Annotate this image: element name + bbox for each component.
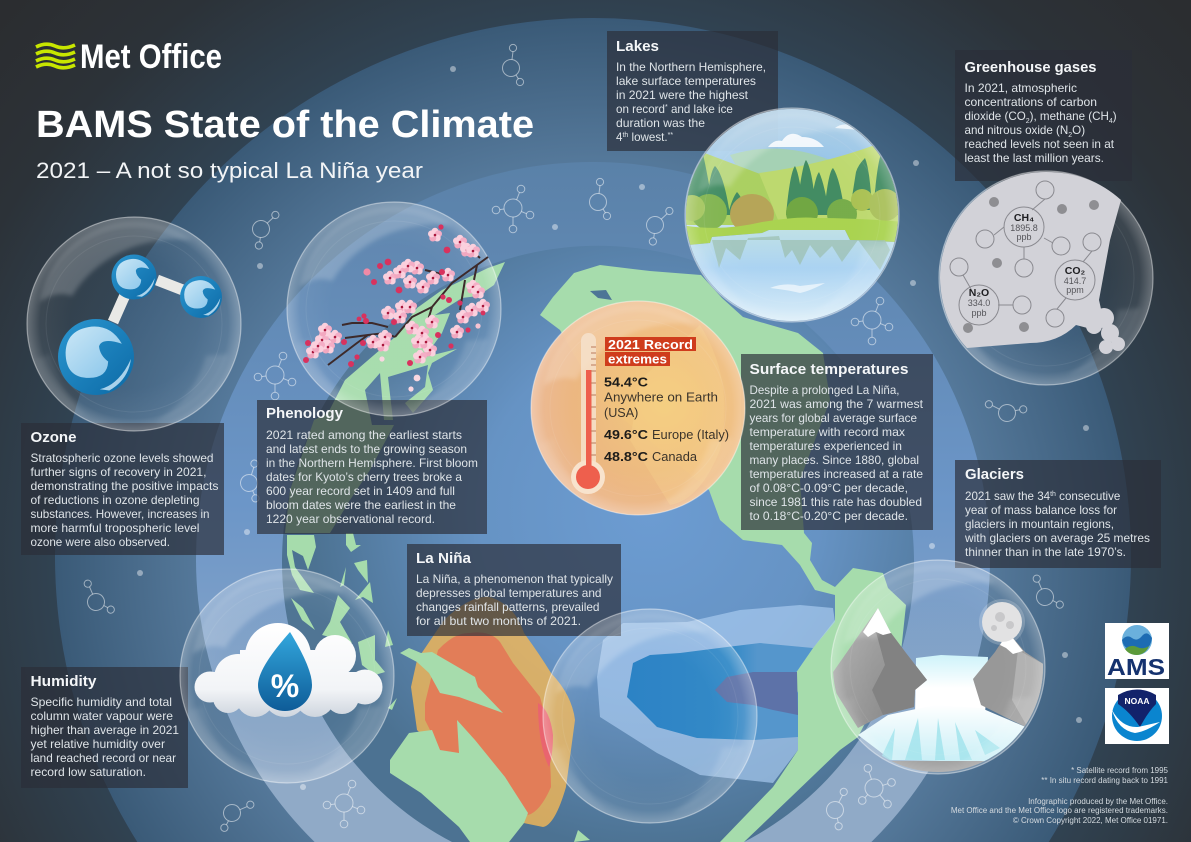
CH4 value: 1895.8 [1010, 223, 1038, 233]
icon: thermometer [571, 333, 605, 494]
bubble: phenology cherry blossom [287, 202, 501, 416]
bubble: glacier scene [831, 560, 1045, 774]
panel: greenhouse gases text: 4 [1109, 118, 1113, 125]
panel: phenology text: Phenology [266, 405, 344, 422]
CH4 value: ppb [1016, 232, 1032, 242]
logo: Met Office [36, 38, 222, 76]
credits [951, 797, 1168, 825]
panel: lakes text [607, 31, 778, 151]
icon: branch [328, 243, 488, 365]
record values: Anywhere on Earth [604, 390, 718, 404]
cold: outer anomaly [597, 605, 835, 783]
bubble: 2021 record extremes thermometer [531, 301, 745, 515]
panel: humidity text: Humidity [30, 673, 97, 690]
panel: glaciers text: th [1050, 491, 1056, 498]
dark dots [963, 197, 1099, 333]
land: Asia [285, 262, 505, 533]
panel: La Niña text: depresses global temperatures and [416, 587, 602, 600]
icon: wave logo [36, 44, 75, 68]
label: record extremes highlight: 2021 Record [608, 338, 693, 352]
panel: glaciers text: 2021 saw the 34 [965, 490, 1050, 503]
CO2 value [1055, 260, 1095, 300]
bubble: humidity cloud [180, 569, 394, 783]
small circles [950, 181, 1101, 327]
panel: greenhouse gases text: 2 [1026, 118, 1030, 125]
subtitle: 2021 – A not so typical La Niña year [36, 158, 424, 183]
record values: 49.6°C [604, 428, 648, 442]
logo: NOAA: NOAA [1124, 696, 1150, 706]
panel: lakes text: and lake ice [668, 103, 733, 116]
panel: lakes text: in 2021 were the highest [616, 89, 749, 102]
icon: glacier [915, 655, 988, 715]
panel: greenhouse gases text: and nitrous oxide (N [964, 124, 1068, 137]
logo: NOAA [1105, 688, 1169, 744]
N2O value: N₂O [969, 287, 989, 299]
record values: 54.4°C [604, 376, 648, 390]
footnotes: * Satellite record from 1995 [1071, 766, 1169, 775]
icon: left mountain [831, 608, 927, 728]
panel: greenhouse gases text: In 2021, atmospheric [964, 82, 1077, 95]
panel: greenhouse gases text: reached levels not seen in at [964, 138, 1115, 151]
panel: ozone text: further signs of recovery in 2021, [30, 466, 207, 479]
N2O value: ppb [971, 308, 987, 318]
icon: snow caps [863, 608, 1023, 654]
heat: core [538, 703, 553, 767]
panel: lakes text: lowest. [628, 131, 668, 144]
CO2 value: ppm [1066, 285, 1084, 295]
label: record extremes highlight [605, 337, 696, 366]
footnotes: ** In situ record dating back to 1991 [1041, 776, 1169, 785]
N2O value [959, 285, 999, 325]
panel: humidity text: land reached record or near [30, 752, 176, 765]
panel: humidity text [21, 667, 188, 788]
land: New Guinea [400, 648, 503, 713]
panel: ozone text [21, 423, 224, 555]
land: Southeast Asia islands [287, 533, 397, 710]
panel: surface temperatures text: 2021 was among the 7 warmest [750, 398, 924, 411]
panel: greenhouse gases text: Greenhouse gases [964, 59, 1096, 76]
logo: AMS [1105, 623, 1169, 680]
icon: bonds [113, 280, 188, 322]
panel: greenhouse gases text: concentrations of carbon [964, 96, 1097, 109]
panel: lakes text: th [622, 132, 628, 139]
bubble: lake landscape [679, 105, 905, 325]
record values: Europe (Italy) [652, 428, 729, 442]
panel: lakes text: on record [616, 103, 665, 116]
atmosphere inner ring [196, 162, 990, 842]
panel: greenhouse gases text: dioxide (CO [964, 110, 1026, 123]
CH4 value [1004, 207, 1044, 247]
panel: phenology text [257, 400, 487, 534]
panel: glaciers text: with glaciers on average 25 metres [964, 532, 1150, 545]
footnotes [1041, 766, 1169, 785]
cold: inner anomaly [627, 643, 813, 740]
CO2 value: 414.7 [1064, 276, 1086, 286]
record values: Canada [652, 450, 697, 464]
land: Hudson Bay sliver [590, 290, 612, 300]
panel: phenology text: 1220 year observational record. [266, 513, 435, 526]
panel: lakes text: 4 [616, 131, 622, 144]
panel: glaciers text: year of mass balance loss for [965, 504, 1117, 517]
panel: ozone text: more harmful tropospheric level [30, 522, 200, 535]
panel: greenhouse gases text: ), methane (CH [1030, 110, 1109, 123]
panel: lakes text: ** [668, 132, 673, 139]
record values [604, 376, 729, 464]
panel: surface temperatures text [741, 354, 933, 530]
panel: glaciers text [955, 460, 1161, 568]
land: Australia [390, 720, 528, 842]
title: BAMS State of the Climate [36, 104, 534, 146]
panel: surface temperatures text: of 0.08°C-0.09°C per decade, [750, 482, 908, 495]
record values: (USA) [604, 406, 638, 420]
N2O value: 334.0 [968, 298, 990, 308]
CO2 value: CO₂ [1065, 265, 1086, 277]
land: Americas [540, 265, 906, 842]
panel: ozone text: Ozone [30, 429, 76, 446]
icon: large oxygen atom [58, 319, 134, 395]
bubble: La Niña [543, 609, 757, 823]
panel: ozone text: of reductions in ozone depleting [30, 494, 200, 507]
panel: La Niña text: La Niña, a phenomenon that typically [416, 573, 613, 586]
panel: surface temperatures text: Surface temperatures [750, 361, 908, 378]
earth disc [282, 246, 914, 842]
panel: La Niña text [407, 544, 621, 636]
panel: phenology text: 600 year record set in 1409 and full [266, 485, 455, 498]
panel: lakes text: lake surface temperatures [616, 75, 756, 88]
icon: gas cloud [940, 172, 1125, 354]
panel: greenhouse gases text: ) [1113, 110, 1117, 123]
panel: La Niña text: changes rainfall patterns, prevailed [416, 601, 600, 614]
panel: ozone text: Stratospheric ozone levels showed [30, 452, 214, 465]
panel: ozone text: ozone were also observed. [30, 536, 170, 549]
panel: humidity text: Specific humidity and total [30, 696, 172, 709]
record values: 48.8°C [604, 450, 648, 464]
land: New Zealand [574, 830, 590, 842]
CH4 value: CH₄ [1014, 212, 1034, 224]
icon: top oxygen atom [112, 254, 156, 300]
panel: glaciers text: Glaciers [965, 466, 1024, 483]
panel: greenhouse gases text [955, 50, 1132, 181]
logo: AMS: AMS [1107, 654, 1165, 680]
logo: Met Office: Met Office [80, 38, 222, 76]
panel: greenhouse gases text: 2 [1068, 132, 1072, 139]
panel: phenology text: in the Northern Hemisphere. First bloom [266, 457, 478, 470]
molecule decorations [77, 44, 1089, 833]
panel: humidity text: column water vapour were [30, 710, 173, 723]
panel: glaciers text: thinner than in the late 1970’s. [965, 546, 1126, 559]
molecule links [963, 199, 1092, 309]
credits: Met Office and the Met Office logo are registered trademarks. [951, 806, 1168, 815]
panel: lakes text: * [665, 104, 668, 111]
bubble: ozone molecule [27, 217, 241, 431]
panel: phenology text: and latest ends to the growing season [266, 443, 467, 456]
panel: humidity text: higher than average in 2021 [30, 724, 179, 737]
icon: cloud [194, 623, 382, 717]
panel: phenology text: bloom dates were the earliest in the [266, 499, 456, 512]
icon: buds [303, 224, 485, 392]
panel: greenhouse gases text: least the last million years. [964, 152, 1104, 165]
panel: surface temperatures text: to 0.18°C-0.20°C per decade. [750, 510, 908, 523]
map: continents and ENSO anomalies [285, 262, 906, 842]
panel: phenology text: dates for Kyoto’s cherry trees broke a [266, 471, 463, 484]
panel: humidity text: yet relative humidity over [30, 738, 165, 751]
credits: © Crown Copyright 2022, Met Office 01971. [1013, 816, 1168, 825]
panel: lakes text: In the Northern Hemisphere, [616, 61, 766, 74]
panel: glaciers text: glaciers in mountain regions, [965, 518, 1114, 531]
icon: water drop [258, 632, 312, 711]
credits: Infographic produced by the Met Office. [1028, 797, 1168, 806]
panel: greenhouse gases text: O) [1072, 124, 1085, 137]
panel: surface temperatures text: temperatures increased at a rate [750, 468, 923, 481]
panel: glaciers text: consecutive [1056, 490, 1120, 503]
panel: humidity text: record low saturation. [30, 766, 146, 779]
panel: surface temperatures text: since 1981 this rate has doubled [750, 496, 922, 509]
lake scene [679, 105, 905, 325]
panel: lakes text: Lakes [616, 38, 659, 55]
label: record extremes highlight: extremes [608, 352, 667, 366]
panel: phenology text: 2021 rated among the earliest starts [266, 429, 462, 442]
panel: La Niña text: for all but two months of 2021. [416, 615, 581, 628]
panel: lakes text: duration was the [616, 117, 705, 130]
panel: ozone text: substances. However, increases in [30, 508, 210, 521]
panel: surface temperatures text: Despite a prolonged La Niña, [750, 384, 900, 397]
panel: surface temperatures text: temperatures experienced in [750, 440, 902, 453]
icon: right oxygen atom [180, 276, 222, 318]
panel: La Niña text: La Niña [416, 550, 472, 567]
panel: ozone text: demonstrating the positive impacts [30, 480, 219, 493]
heat: outer anomaly [411, 597, 575, 827]
icon: right mountain [973, 638, 1043, 726]
icon: ice dome [858, 705, 1028, 762]
panel: surface temperatures text: years for global average surface [750, 412, 917, 425]
panel: surface temperatures text: many places. Since 1880, global [750, 454, 919, 467]
drop percent: % [271, 668, 299, 704]
bubble: greenhouse gases diagram [939, 171, 1153, 385]
heat: inner anomaly [425, 632, 551, 815]
icon: blossoms [306, 228, 490, 364]
panel: surface temperatures text: temperature with record max [750, 426, 905, 439]
cold: core [715, 672, 798, 715]
icon: moon [979, 599, 1025, 645]
